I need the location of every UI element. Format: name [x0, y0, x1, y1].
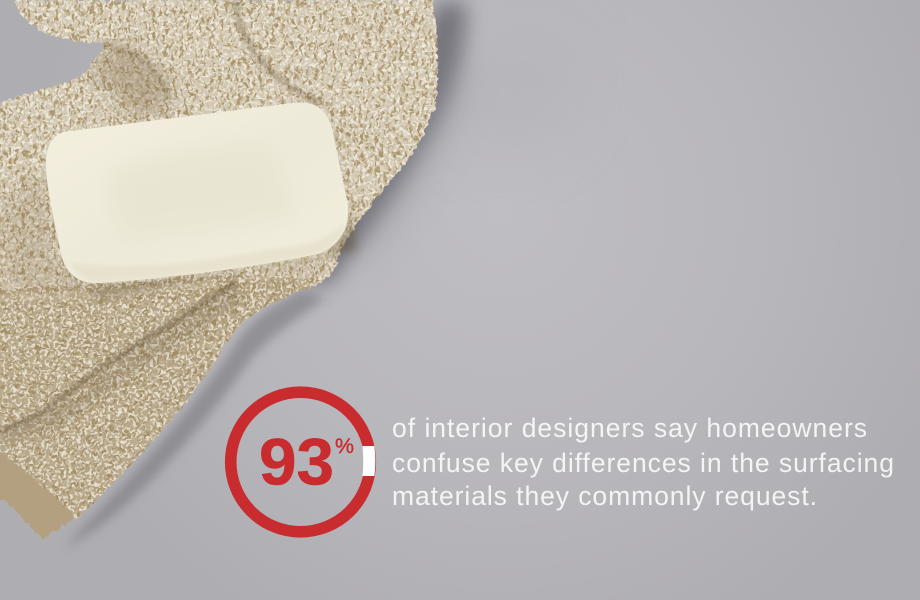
towel terry texture: middle fold: [0, 274, 240, 432]
towel creases and fold shading: [0, 0, 345, 440]
statistic value: 93: [259, 424, 334, 498]
statistic description: [392, 413, 894, 511]
soft shadows on the surface: [65, 2, 568, 548]
towel terry texture: upper folds: [0, 0, 450, 300]
statistic description: confuse key differences in the surfacing: [392, 448, 894, 478]
soap bar: [46, 102, 348, 283]
statistic gauge: 93 percent: [231, 392, 375, 532]
towel base cloth: [0, 0, 450, 550]
statistic description: materials they commonly request.: [392, 481, 817, 511]
soap inner shading: [108, 144, 295, 240]
towel loop highlights: [0, 0, 450, 550]
towel left-edge backing: [0, 104, 7, 500]
towel terry texture: lower strip: [2, 279, 300, 528]
percent sign: %: [335, 435, 354, 458]
soap bar shadow: [62, 205, 356, 298]
gauge ring: [231, 392, 370, 532]
statistic description: of interior designers say homeowners: [392, 413, 867, 443]
towel lower fold base: [0, 275, 320, 530]
towel: [0, 0, 450, 561]
towel woven hem: [0, 450, 75, 542]
gauge remaining segment: [362, 446, 375, 476]
